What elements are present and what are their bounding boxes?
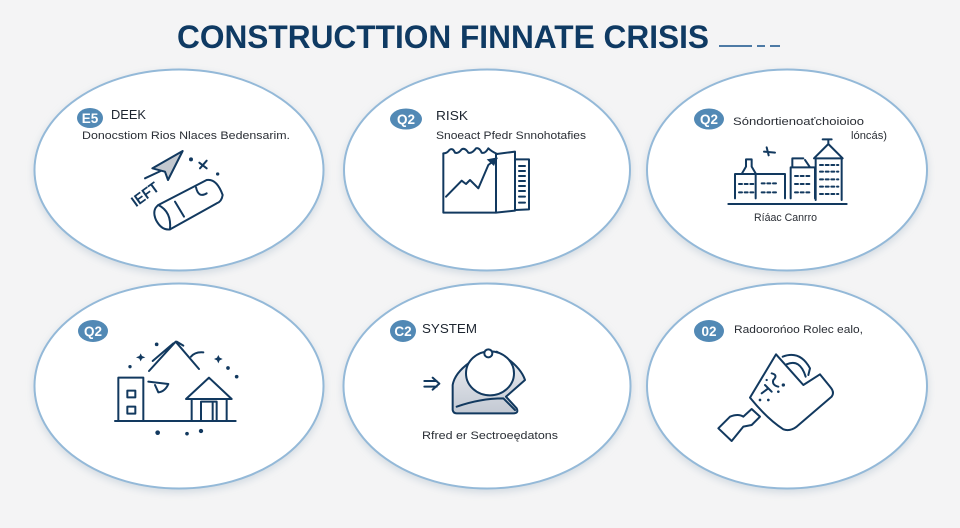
icon: chart report [443,148,529,213]
panel outline [34,70,324,270]
description: Rfred er Sectroeędatons [422,430,559,442]
heading: DEEK [111,108,147,122]
panel outline [647,284,927,488]
description [733,116,887,142]
panel outline [344,284,630,488]
description: Sóndortienoaťchoioioo [733,116,864,128]
panel: measuring jug [647,284,927,488]
panel outline [647,70,927,270]
badge [77,108,103,128]
badge [694,108,724,130]
icon: jug and bottle [718,354,833,441]
panel: houses [34,284,324,488]
panel: buildings [647,70,927,270]
title: CONSTRUCTTION FINNATE CRISIS [177,19,709,55]
badge: 02 [701,324,717,339]
description: Donocstiom Rios Nlaces Bedensarim. [82,130,290,142]
badge [694,320,724,342]
badge: E5 [82,111,99,126]
heading: SYSTEM [422,322,477,336]
panel outline [344,70,630,270]
panel outline [34,284,324,488]
panel: deek [34,70,324,270]
description: Snoeact Pfedr Snnohotafies [436,130,587,142]
panel: system [344,284,630,488]
icon: buildings [728,139,847,204]
icon: damaged house [115,342,238,435]
heading: RISK [436,109,469,123]
badge [390,320,416,342]
badge: Q2 [700,112,718,127]
description: Radoorońoo Rolec ealo, [734,324,863,336]
panel: risk [344,70,630,270]
badge: C2 [394,324,412,339]
badge: Q2 [84,324,102,339]
icon: bag and arrow [424,349,525,413]
icon: arrow and capsule: IEFT [128,179,163,211]
description: lóncás) [851,130,887,142]
badge [78,320,108,342]
label: Ríáac Canrro [754,212,817,224]
icon: arrow and capsule [128,151,223,229]
badge: Q2 [397,112,415,127]
badge [390,108,422,130]
